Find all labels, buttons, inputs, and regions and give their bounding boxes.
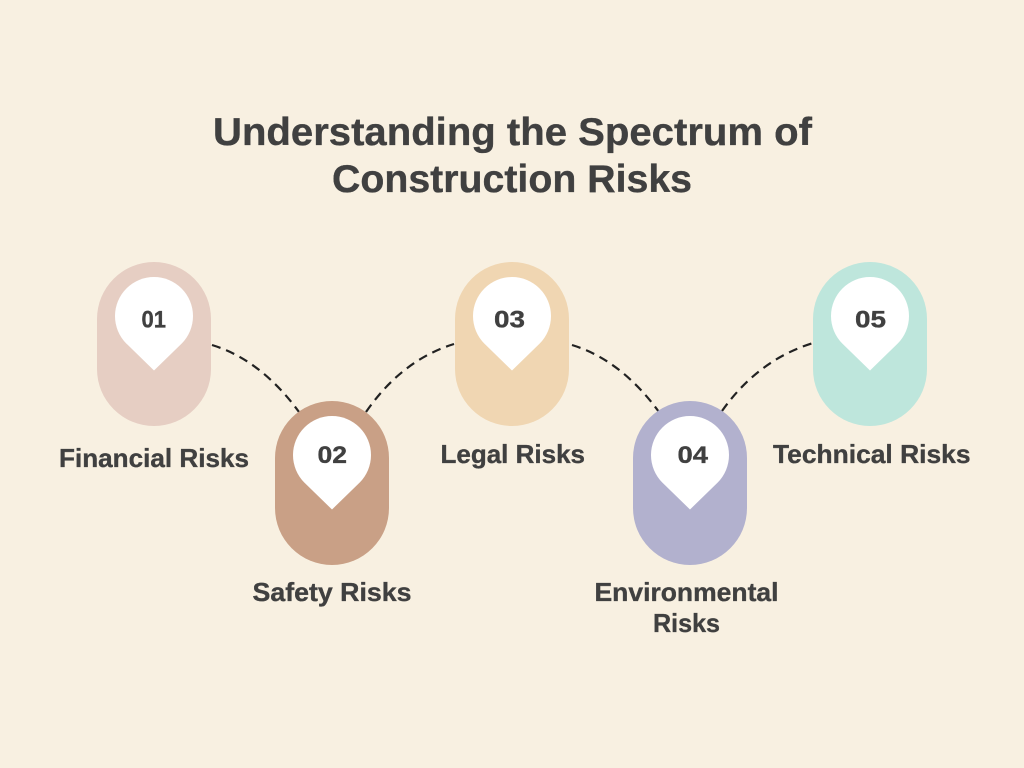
arrow: connector 04 to 05 bbox=[722, 343, 813, 411]
step 02: Safety Risks bbox=[252, 401, 412, 607]
pill 03 bbox=[455, 262, 569, 426]
arrow: connector 01 to 02 bbox=[212, 345, 299, 412]
pill 04 bbox=[633, 401, 747, 565]
number 03: 03 bbox=[494, 306, 525, 334]
arrow: connector 02 to 03 bbox=[366, 344, 454, 412]
number 05: 05 bbox=[855, 306, 886, 334]
title bbox=[213, 111, 813, 201]
arrow: connector 03 to 04 bbox=[572, 345, 659, 412]
label: Legal Risks: Legal Risks bbox=[440, 439, 585, 469]
step 05: Technical Risks bbox=[773, 262, 970, 469]
pill 02 bbox=[275, 401, 389, 565]
step 01: Financial Risks bbox=[59, 262, 249, 473]
icon: pin 04 bbox=[651, 416, 729, 510]
pill 05 bbox=[813, 262, 927, 426]
icon: pin 03 bbox=[473, 277, 551, 370]
label: Technical Risks: Technical Risks bbox=[773, 439, 970, 469]
icon: pin 02 bbox=[293, 416, 371, 510]
icon: pin 01 bbox=[115, 277, 193, 370]
number 01: 01 bbox=[142, 306, 166, 334]
label: Environmental Risks bbox=[594, 577, 778, 638]
step 03: Legal Risks bbox=[440, 262, 585, 469]
number 04: 04 bbox=[678, 442, 709, 469]
label: Safety Risks: Safety Risks bbox=[252, 577, 412, 607]
label: Environmental Risks: Risks bbox=[653, 608, 720, 638]
label: Financial Risks: Financial Risks bbox=[59, 443, 249, 473]
step 04: Environmental Risks bbox=[594, 401, 778, 638]
title: Understanding the Spectrum of bbox=[213, 111, 813, 154]
icon: pin 05 bbox=[831, 277, 909, 370]
title: Construction Risks bbox=[332, 158, 692, 201]
pill 01 bbox=[97, 262, 211, 426]
label: Environmental Risks: Environmental bbox=[594, 577, 778, 607]
number 02: 02 bbox=[318, 442, 347, 469]
